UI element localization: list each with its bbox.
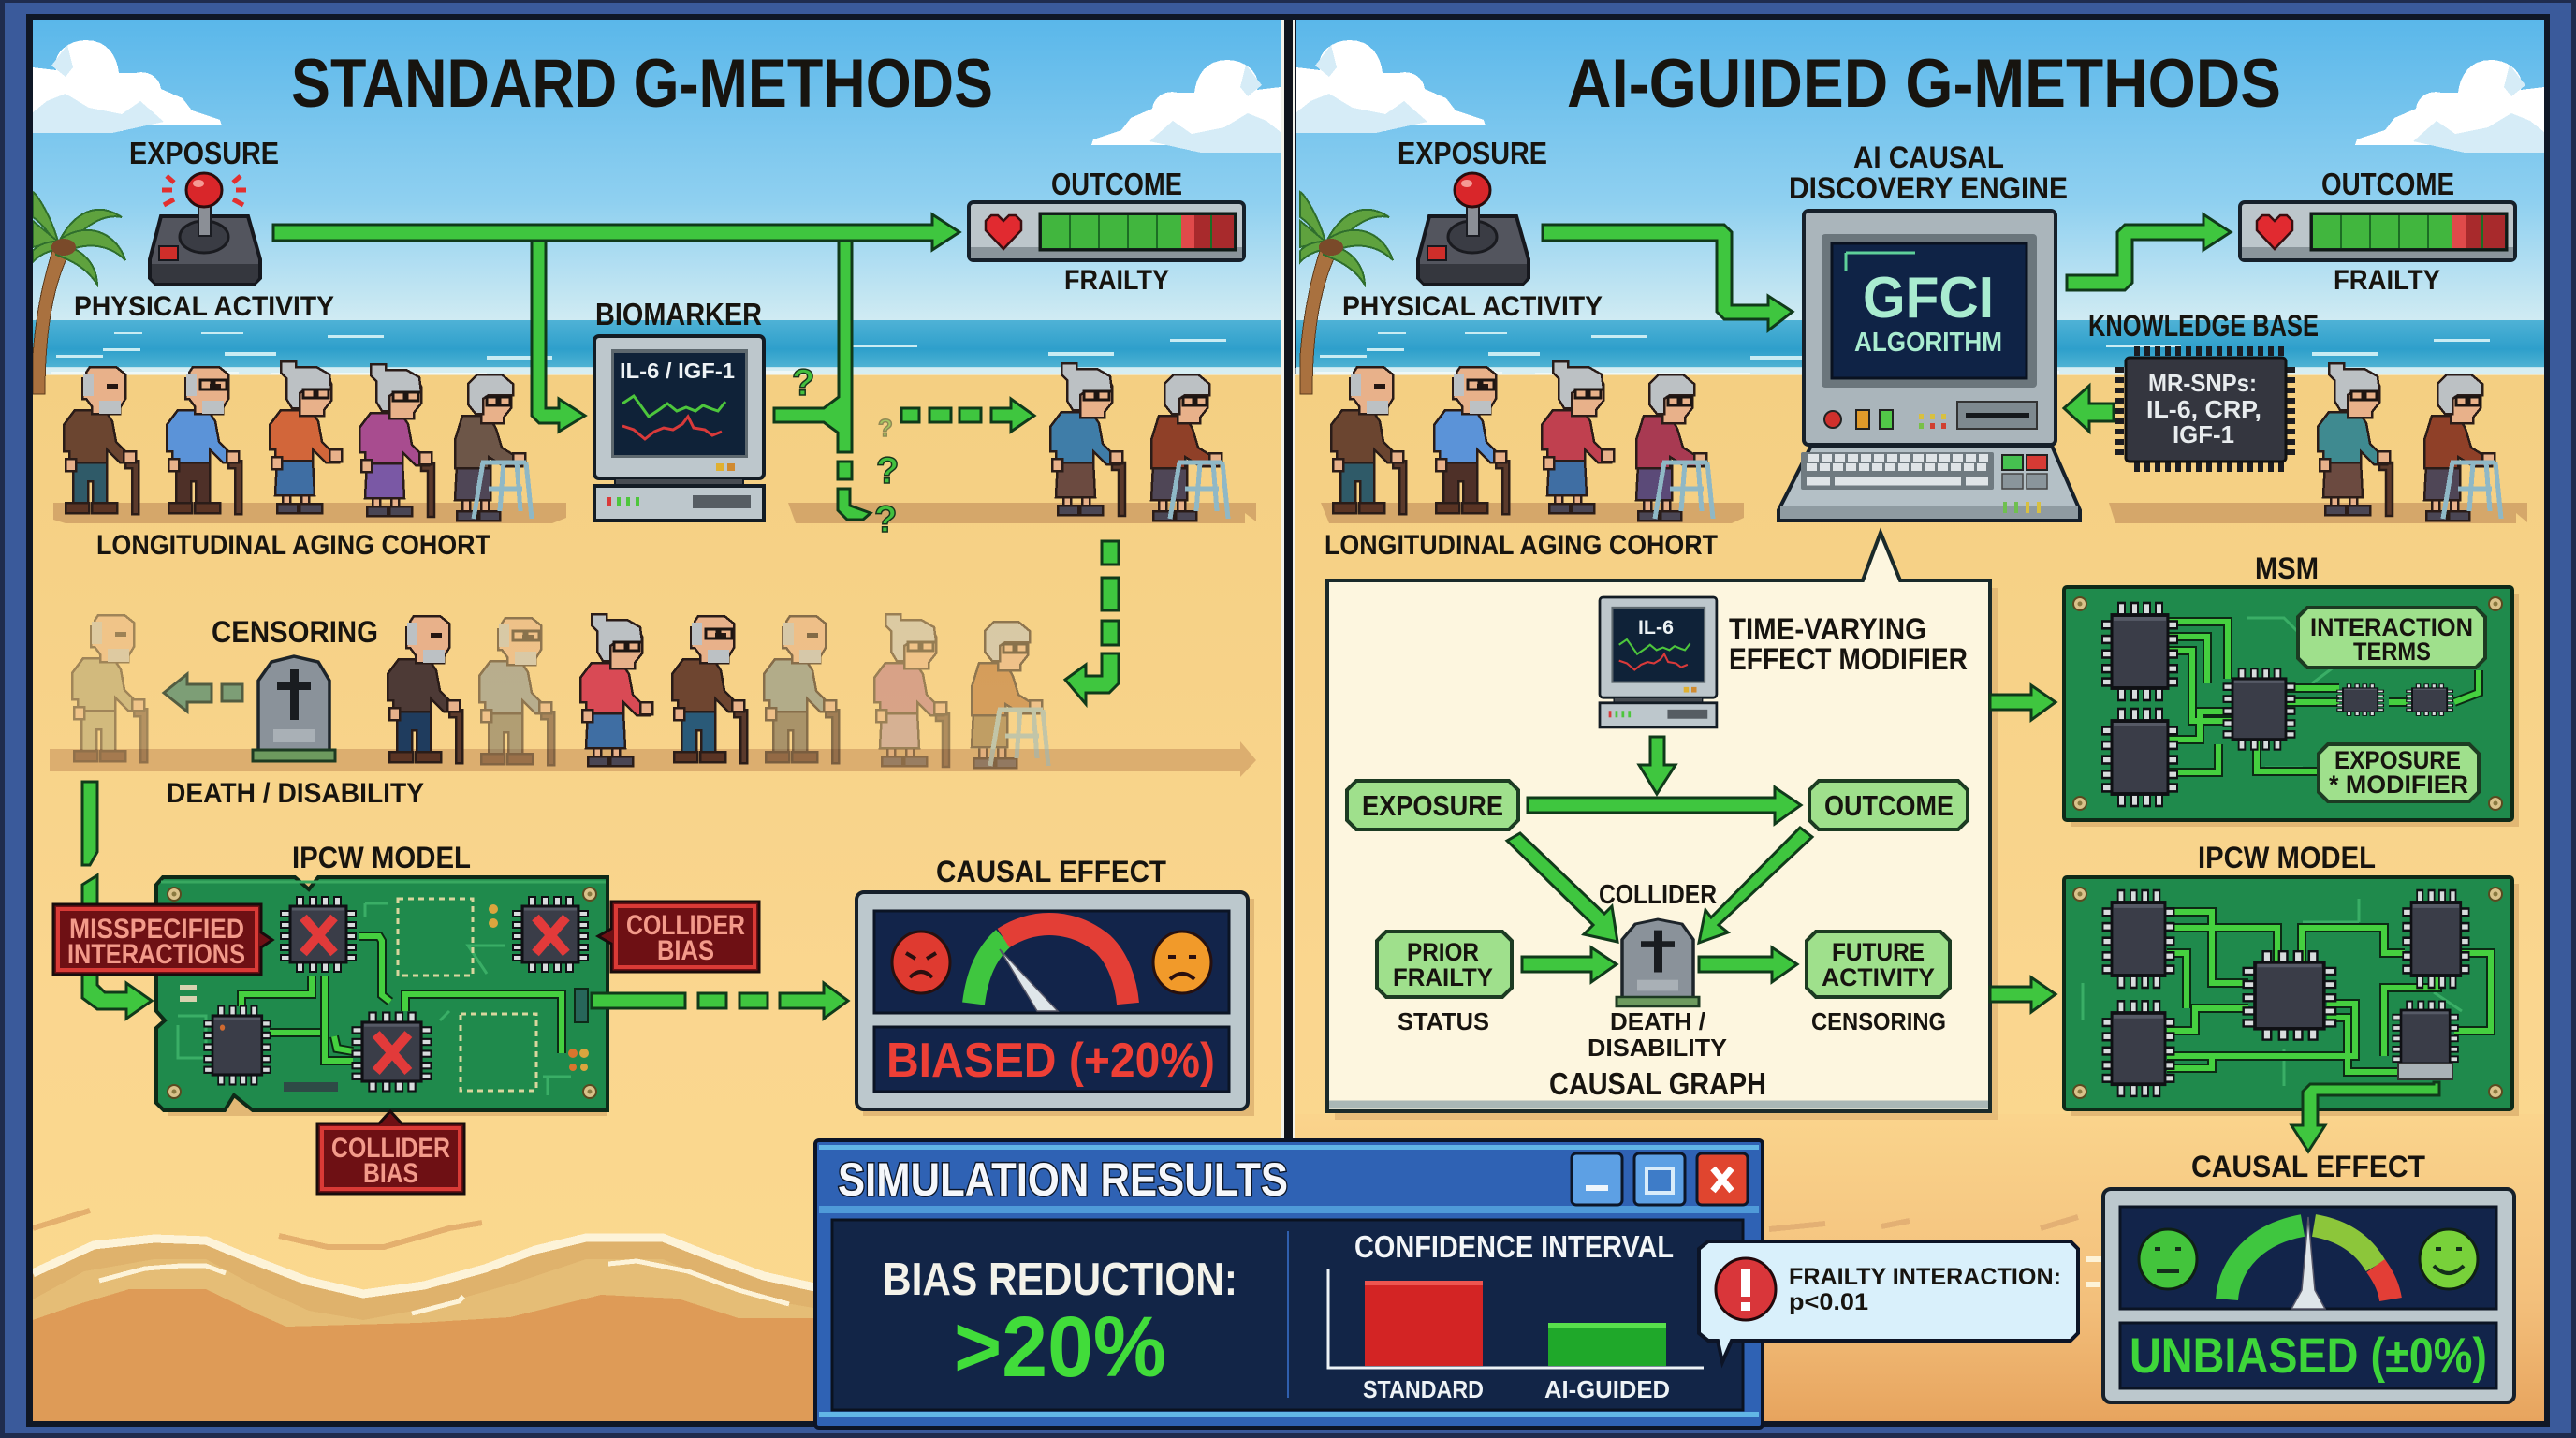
label: causal effect left: CAUSAL EFFECT: [936, 855, 1166, 888]
sub: exposure modifier pill: [2319, 744, 2479, 801]
sub: gauge arc: [973, 924, 1128, 1004]
sub: bar chart: AI-GUIDED: [1544, 1375, 1670, 1403]
sub: failing chip top left: [281, 897, 356, 972]
sub: future activity pill: ACTIVITY: [1822, 963, 1935, 991]
icon: knowledge base chip: MR-SNPs:: [2148, 369, 2257, 397]
label: knowledge base: KNOWLEDGE BASE: [2088, 309, 2319, 343]
ground strip: right left: [1321, 503, 1744, 523]
sub: modifier arrow: [1639, 737, 1676, 794]
arrow: exposure to ai engine: [1543, 225, 1793, 330]
sub: prior frailty pill: FRAILTY: [1393, 963, 1493, 991]
arrow: to censored: [164, 674, 242, 712]
label: outcome right: OUTCOME: [2321, 167, 2454, 201]
sub: future activity pill: FUTURE: [1832, 938, 1925, 966]
icon: biomarker monitor: [594, 336, 764, 521]
label: msm: MSM: [2255, 551, 2319, 585]
sub: confidence interval heading: CONFIDENCE INTERVAL: [1354, 1229, 1674, 1264]
callout: collider bias right: COLLIDER: [626, 910, 745, 941]
sub: outcome to collider arrow: [1699, 828, 1812, 943]
label: biomarker: BIOMARKER: [595, 297, 762, 331]
arrow: biomarker and direct path split: [774, 234, 852, 452]
sub: gauge arc: [2227, 1225, 2391, 1299]
title: standard g-methods: STANDARD G-METHODS: [291, 46, 993, 122]
sub: bar chart: [1328, 1269, 1704, 1403]
sub: future activity pill: [1807, 932, 1950, 997]
monitor text: IL-6 / IGF-1: [620, 359, 735, 383]
label: exposure: EXPOSURE: [129, 136, 279, 170]
sub: death disability label: DEATH /: [1610, 1007, 1705, 1035]
label: ipcw model: IPCW MODEL: [292, 841, 471, 874]
chart: msm circuit board: [2064, 587, 2519, 827]
arrow: engine to outcome: [2067, 214, 2231, 290]
question marks: ?: [878, 414, 893, 442]
panel: ai-guided g-methods background: [1295, 20, 2544, 1421]
callout: misspecified interactions: MISSPECIFIED: [69, 914, 244, 945]
sub: outcome pill: OUTCOME: [1824, 789, 1954, 822]
arrow: graph to msm: [1990, 685, 2056, 720]
gauge: unbiased effect: [2103, 1189, 2514, 1402]
callout: collider bias right: [598, 902, 759, 972]
cohort: later wave pair: [1050, 363, 1228, 521]
callout: collider bias bottom: BIAS: [363, 1158, 418, 1189]
sub: time varying effect modifier: TIME-VARYING: [1729, 612, 1926, 646]
question marks: ?: [876, 450, 899, 492]
sub: status label: STATUS: [1398, 1007, 1489, 1035]
sub: dashed empty sockets: [398, 899, 536, 1091]
chart: right ipcw circuit board: [2064, 877, 2519, 1116]
callout: collider bias right: BIAS: [657, 935, 714, 966]
arrow: dashed down to censoring row: [1065, 541, 1119, 704]
ground strip: right right: [2109, 503, 2527, 523]
question marks: [792, 362, 899, 540]
arrow: branch to biomarker: [532, 234, 585, 432]
sub: exposure to collider arrow: [1507, 833, 1617, 942]
ground strip: cohort left: [53, 503, 566, 523]
icon: joystick: [1418, 173, 1529, 284]
chart: left ipcw circuit board: [156, 877, 607, 1116]
sub: tombstone collider: [1617, 919, 1699, 1006]
arrow: dashed broken path after biomarker: [838, 399, 1034, 520]
label: death / disability: DEATH / DISABILITY: [167, 778, 424, 809]
sub: collider label: COLLIDER: [1599, 880, 1717, 910]
arrow: dashed to ipcw model: [82, 782, 152, 1019]
sub: needle: [1000, 949, 1058, 1011]
sub: exposure modifier pill: * MODIFIER: [2329, 770, 2468, 799]
callout: frailty interaction: [1699, 1241, 2078, 1362]
sub: worried face: [1153, 932, 1211, 993]
sub: future activity arrow: [1699, 947, 1797, 982]
cohort: five older adults: [64, 361, 532, 521]
label: ai causal discovery engine: [1789, 140, 2068, 205]
label: censoring: CENSORING: [212, 615, 378, 649]
sub: minimize button: [1572, 1153, 1622, 1205]
label: ipcw model right: IPCW MODEL: [2198, 841, 2376, 874]
sub: prior frailty pill: PRIOR: [1407, 938, 1479, 966]
panel: causal graph speech bubble: [1327, 533, 1998, 1120]
title: ai-guided g-methods: AI-GUIDED G-METHODS: [1567, 46, 2281, 122]
label: physical activity right: PHYSICAL ACTIVITY: [1342, 291, 1603, 322]
sub: chips: [2102, 890, 2469, 1096]
icon: frailty bar right: [2240, 202, 2515, 260]
follow-up row of older adults, some faded: [72, 614, 1048, 768]
sub: neutral face: [2139, 1229, 2197, 1289]
sub: il-6 monitor: [1600, 597, 1717, 727]
callout: misspecified interactions: INTERACTIONS: [67, 939, 245, 970]
sub: chips: [2102, 603, 2452, 806]
gauge: biased effect: [856, 892, 1254, 1116]
sub: close button: [1697, 1153, 1748, 1205]
label: frailty right: FRAILTY: [2334, 265, 2440, 296]
question marks: ?: [792, 362, 814, 404]
sub: exposure to outcome arrow: [1528, 787, 1801, 824]
arrow: ipcw to causal effect: [2291, 1082, 2439, 1152]
sub: causal graph caption: CAUSAL GRAPH: [1549, 1066, 1766, 1101]
icon: frailty health bar: [969, 202, 1244, 260]
ground strip: cohort right: [788, 503, 1256, 523]
question marks: ?: [874, 499, 897, 540]
sub: failing chip bottom centre: [352, 1013, 431, 1092]
label: causal effect right: CAUSAL EFFECT: [2191, 1150, 2425, 1183]
sub: prior frailty pill: [1377, 932, 1512, 997]
label: longitudinal aging cohort: LONGITUDINAL AGING COHORT: [96, 530, 490, 561]
callout: collider bias bottom: COLLIDER: [331, 1133, 450, 1164]
sub: time varying effect modifier: EFFECT MODIFIER: [1729, 642, 1968, 676]
label: ai causal discovery engine: DISCOVERY ENGINE: [1789, 171, 2068, 205]
sub: exposure pill: [1347, 781, 1518, 829]
icon: knowledge base chip: IL-6, CRP,: [2146, 395, 2261, 423]
arrow: exposure to outcome: [273, 214, 959, 250]
callout: misspecified interactions: [53, 904, 272, 975]
icon: knowledge base chip: IGF-1: [2173, 420, 2234, 448]
label: outcome: OUTCOME: [1051, 167, 1182, 201]
label: frailty: FRAILTY: [1064, 265, 1169, 296]
sub: p value: p<0.01: [1789, 1289, 1868, 1315]
sub: interaction terms pill: INTERACTION: [2310, 613, 2473, 641]
wave sand bands: [33, 1241, 813, 1320]
callout: collider bias bottom: [317, 1111, 464, 1194]
sub: death disability label: [1588, 1007, 1727, 1062]
sub: prior frailty arrow: [1522, 947, 1617, 982]
icon: joystick with red alert rays: [150, 173, 260, 284]
sub: angry face: [892, 932, 950, 993]
sub: needle: [2291, 1217, 2325, 1309]
sub: il-6 label: IL-6: [1638, 617, 1674, 638]
cohort: four older adults right: [1331, 361, 1713, 521]
sub: death disability label: DISABILITY: [1588, 1034, 1727, 1062]
sub: failing chip top right: [513, 897, 588, 972]
sub: maximize button: [1634, 1153, 1685, 1205]
sub: interaction terms pill: [2298, 608, 2485, 668]
sub: frailty interaction text: FRAILTY INTERACTION:: [1789, 1264, 2061, 1290]
label: longitudinal aging cohort right: LONGITUDINAL AGING COHORT: [1325, 530, 1718, 561]
panel: standard g-methods background: [33, 20, 1281, 1421]
sub: bar chart: STANDARD: [1363, 1375, 1484, 1403]
sub: unbiased readout: UNBIASED (±0%): [2130, 1328, 2487, 1384]
arrow: graph to ipcw: [1990, 977, 2056, 1012]
sub: censoring label: CENSORING: [1811, 1007, 1946, 1035]
screen text: GFCI: [1863, 266, 1994, 330]
window: simulation results: [815, 1140, 1763, 1428]
sub: window title: SIMULATION RESULTS: [838, 1153, 1288, 1206]
sub: time varying effect modifier: [1729, 612, 1968, 676]
label: physical activity: PHYSICAL ACTIVITY: [74, 291, 334, 322]
sub: plain chip: [204, 1005, 271, 1084]
sub: smiling face: [2420, 1229, 2478, 1289]
sub: outcome pill: [1809, 781, 1968, 829]
sub: bias reduction value: >20%: [954, 1299, 1166, 1395]
sub: bias reduction label: BIAS REDUCTION:: [883, 1255, 1237, 1305]
label: exposure right: EXPOSURE: [1398, 136, 1547, 170]
sub: exposure modifier pill: EXPOSURE: [2334, 746, 2461, 774]
keyboard: [1801, 452, 1994, 490]
icon: ai causal discovery computer: ALGORITHM: [1854, 328, 2002, 358]
icon: knowledge base chip: [2119, 351, 2291, 467]
label: ai causal discovery engine: AI CAUSAL: [1853, 140, 2004, 174]
sub: alert icon: [1716, 1258, 1776, 1320]
arrow: dashed to causal effect: [592, 983, 848, 1019]
icon: tombstone: [253, 656, 335, 761]
arrow: knowledge base to engine: [2064, 386, 2114, 432]
sub: exposure pill: EXPOSURE: [1362, 789, 1503, 822]
icon: ai causal discovery computer: [1778, 211, 2080, 521]
sub: interaction terms pill: TERMS: [2353, 638, 2431, 666]
center divider: [1281, 20, 1295, 1143]
sub: biased readout: BIASED (+20%): [886, 1034, 1215, 1088]
cohort: later pair right: [2318, 363, 2501, 521]
ground strip: timeline arrow: [50, 741, 1256, 777]
